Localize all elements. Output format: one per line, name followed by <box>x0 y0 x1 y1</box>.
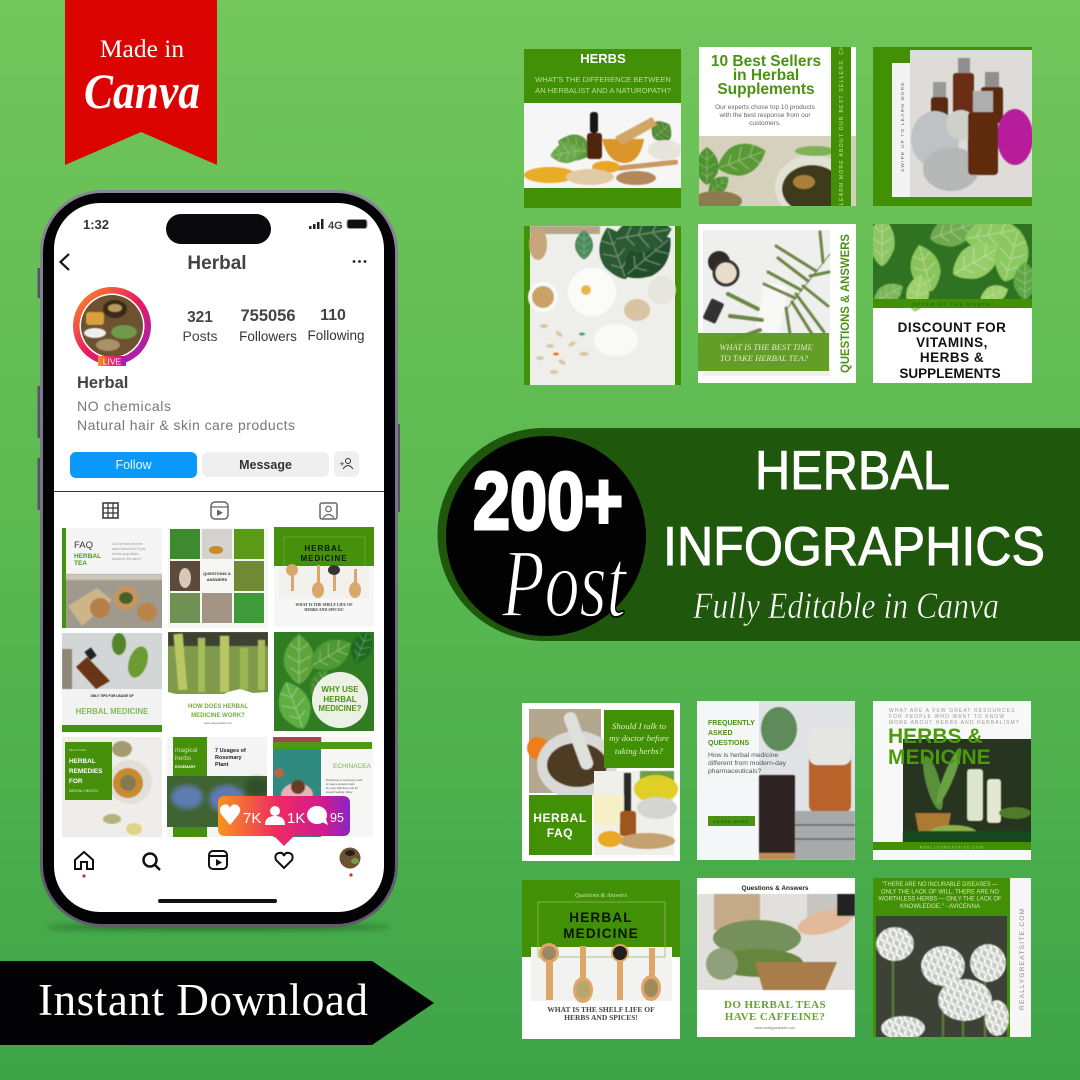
grid post: how does herbal medicine work: www.reallygreatsite.com <box>204 721 232 725</box>
post tile: herbs difference: WHAT'S THE DIFFERENCE BETWEEN <box>535 75 671 84</box>
post tile: frequently asked questions: How is herbal medicine <box>708 752 778 759</box>
post tile: herbs and medicine: WHAT ARE A FEW GREAT RESOURCES <box>889 708 1016 714</box>
grid post: why use herbal medicine: HERBAL <box>323 695 357 704</box>
grid post: magical herbs rosemary: Rosemary <box>215 755 243 761</box>
grid post: herbal medicine spoons: MEDICINE <box>300 554 348 563</box>
grid post: magical herbs rosemary: magical <box>175 747 198 754</box>
grid post: herbal medicine spoons: WHAT IS THE SHELF LIFE OF <box>295 602 353 607</box>
post tile: herbs difference: HERBS <box>580 51 626 66</box>
grid post: magical herbs rosemary: 7 Usages of <box>215 748 246 754</box>
grid post: why use herbal medicine: WHY USE <box>321 685 359 694</box>
grid post: FAQ herbal tea: same herbal tea? If yes, <box>112 547 146 551</box>
post tile: avicenna quote: "THERE ARE NO INCURABLE DISEASES — <box>882 881 998 888</box>
grid post: magical herbs rosemary: herbs <box>175 755 192 762</box>
grid post: how does herbal medicine work: HOW DOES HERBAL <box>188 704 248 710</box>
grid post: herbal remedies: REMEDIES <box>69 768 103 775</box>
post tile: herbs and medicine: REALLYGREATSITE.COM <box>920 846 984 850</box>
grid post: herbal remedies: MENTAL HEALTH <box>69 789 98 793</box>
instant download arrow <box>0 961 434 1045</box>
follow buttons <box>70 451 359 478</box>
banner title: HERBAL <box>755 439 950 501</box>
banner title: INFOGRAPHICS <box>663 515 1045 577</box>
post tile: herbal faq: HERBAL <box>533 811 587 825</box>
grid post: FAQ herbal tea: TEA <box>74 560 87 567</box>
grid post: how does herbal medicine work <box>168 632 268 725</box>
ribbon: Made in Canva: Made in <box>100 34 184 63</box>
post tile: herbal medicine: MEDICINE <box>563 926 639 941</box>
grid post: FAQ herbal tea: are the proportions <box>112 552 139 556</box>
grid post: FAQ herbal tea: HERBAL <box>74 553 101 560</box>
notification bubble: 1K <box>287 810 305 827</box>
post tile: frequently asked questions <box>697 701 855 860</box>
post tile: frequently asked questions: pharmaceuticals? <box>708 768 761 775</box>
grid post: herbal remedies: FOR <box>69 778 83 785</box>
profile stats <box>182 307 365 344</box>
post tile: frequently asked questions: FREQUENTLY <box>708 720 755 727</box>
grid post: essential oil tips: HERBAL MEDICINE <box>76 707 148 716</box>
post tile: 10 best sellers: Our experts chose top 10 products <box>715 104 816 111</box>
profile stats: 110 <box>320 307 346 324</box>
profile header <box>60 253 366 274</box>
grid post: echinacea: ECHINACEA <box>333 763 372 770</box>
post tile: herbal medicine: HERBAL <box>569 910 633 925</box>
bio text: Herbal <box>77 374 128 392</box>
post tile: 10 best sellers: customers. <box>749 120 781 127</box>
grid post: FAQ herbal tea <box>62 528 162 628</box>
grid post: magical herbs rosemary: ROSEMARY <box>175 765 196 769</box>
grid post: herbal remedies: Tips & Tricks <box>69 748 87 752</box>
profile tab icons <box>103 502 337 519</box>
grid post: herbal medicine spoons: HERBAL <box>304 544 344 553</box>
bottom navigation <box>75 848 360 878</box>
post tile: herbs and medicine <box>873 701 1031 860</box>
post tile: questions and answers tea: WHAT IS THE BEST TIME <box>719 342 813 352</box>
status bar: 1:32 <box>83 217 109 232</box>
follow buttons: Follow <box>115 458 153 472</box>
post tile: herbal faq <box>522 703 680 861</box>
notification bubble <box>218 796 350 846</box>
grid post: echinacea: flu, sore infections and for <box>326 786 358 790</box>
grid post: herbs mosaic <box>168 528 268 628</box>
grid post: herbal remedies <box>62 737 162 837</box>
profile stats: 321 <box>187 309 213 326</box>
post tile: 10 best sellers: Supplements <box>717 81 815 98</box>
grid post: herbs mosaic: QUESTIONS & <box>203 571 231 576</box>
grid post: FAQ herbal tea: FAQ <box>74 540 93 551</box>
profile stats: Following <box>307 328 365 343</box>
post tile: herbal faq: FAQ <box>547 826 573 840</box>
post tile: avicenna quote: REALLYGREATSITE.COM <box>1019 908 1026 1010</box>
post tile: herbs and medicine: FOR PEOPLE WHO WANT TO KNOW <box>889 714 1005 720</box>
instant download arrow: Instant Download <box>38 975 368 1025</box>
post tile: herbal medicine <box>522 880 680 1039</box>
post tile: herbal medicine: HERBS AND SPICES! <box>564 1013 638 1022</box>
post tile: herbal teas caffeine <box>697 878 855 1037</box>
grid post: FAQ herbal tea: Can my kids drink the <box>112 542 143 546</box>
bio text: NO chemicals <box>77 398 171 414</box>
post tile: herbal teas caffeine: www.reallygreatsite.com <box>755 1026 795 1030</box>
post tile: avicenna quote: ONLY THE LACK OF WILL. THERE ARE NO <box>881 888 999 896</box>
post tile: frequently asked questions: QUESTIONS <box>708 740 750 747</box>
post tile: herbal faq: my doctor before <box>609 733 669 743</box>
profile stats: Posts <box>182 328 218 344</box>
profile header: Herbal <box>187 253 247 274</box>
post tile: essential oils: SWIPE UP TO LEARN MORE <box>900 81 906 172</box>
post tile: discount: SUPPLEMENTS <box>899 366 1001 381</box>
post tile: herbs difference: AN HERBALIST AND A NATUROPATH? <box>535 86 671 95</box>
post tile: 10 best sellers <box>699 0 856 206</box>
post tile: herbs and medicine: MEDICINE <box>888 746 991 769</box>
bio text: Natural hair & skin care products <box>77 417 295 433</box>
grid post: why use herbal medicine: MEDICINE? <box>319 704 362 713</box>
post tile: herbal teas caffeine: DO HERBAL TEAS <box>724 999 826 1011</box>
post tile: discount: DISCOUNT FOR <box>898 320 1006 335</box>
profile stats: 755056 <box>240 307 296 325</box>
post tile: flatlay herbs <box>524 226 681 385</box>
post tile: avicenna quote: WORTHLESS HERBS — ONLY THE LACK OF <box>878 896 1002 902</box>
post tile: discount: VITAMINS, <box>916 335 988 350</box>
bio text <box>77 374 295 433</box>
post tile: avicenna quote: KNOWLEDGE." - AVICENNA <box>900 903 980 910</box>
post tile: avicenna quote <box>873 878 1031 1037</box>
grid post: essential oil tips <box>62 633 162 732</box>
grid post: echinacea: wound healing. Many <box>326 790 353 794</box>
post tile: herbs and medicine: HERBS & <box>888 725 983 748</box>
post tile: discount: HERBS & <box>920 350 984 365</box>
post tile: frequently asked questions: ASKED <box>708 730 733 737</box>
200+ post circle: Post <box>501 530 628 638</box>
post tile: 10 best sellers: 10 Best Sellers <box>711 53 821 70</box>
follow buttons: Message <box>239 458 292 472</box>
heart icon <box>220 804 240 825</box>
post tile: questions and answers tea: TO TAKE HERBAL TEA? <box>720 353 809 363</box>
ribbon: Made in Canva: Canva <box>84 63 200 119</box>
grid post: essential oil tips: ONLY TIPS FOR USAGE OF <box>90 694 134 698</box>
banner title: Fully Editable in Canva <box>692 586 999 627</box>
home indicator <box>158 899 277 903</box>
post tile: 10 best sellers: in Herbal <box>733 67 799 84</box>
post tile: questions and answers tea: QUESTIONS & ANSWERS <box>838 234 852 373</box>
post tile: questions and answers tea <box>698 224 856 383</box>
post tile: herbal teas caffeine: Questions & Answers <box>742 885 809 892</box>
post tile: herbal medicine: WHAT IS THE SHELF LIFE OF <box>547 1005 655 1014</box>
post tile: herbs difference <box>524 49 681 208</box>
grid post: herbal medicine spoons <box>274 527 374 612</box>
post tile: frequently asked questions: LEARN MORE <box>714 820 749 824</box>
follow buttons: + <box>339 459 345 469</box>
post tile: 10 best sellers: with the best response from our <box>718 112 811 119</box>
post tile: herbal teas caffeine: HAVE CAFFEINE? <box>725 1011 825 1023</box>
grid post: echinacea: Echinacea is commonly used <box>326 778 363 782</box>
divider <box>54 491 384 492</box>
grid post: echinacea: to treat a present colds, <box>326 782 355 786</box>
grid post: why use herbal medicine <box>274 632 374 731</box>
phone mockup <box>38 190 400 930</box>
grid post: herbal medicine spoons: HERBS AND SPICES! <box>304 607 344 612</box>
avatar with live badge: LIVE <box>103 356 122 366</box>
post tile: herbal faq: Should I talk to <box>612 721 667 731</box>
post tile: herbs and medicine: MORE ABOUT HERBS AND HERBALISM? <box>889 720 1020 726</box>
notification bubble: 7K <box>243 810 261 827</box>
post tile: essential oils <box>873 47 1032 206</box>
post tile: frequently asked questions: different from modern-day <box>708 760 787 767</box>
status bar <box>83 214 367 244</box>
grid post: magical herbs rosemary <box>167 737 267 837</box>
banner title <box>663 439 1045 627</box>
200+ post circle <box>446 436 646 638</box>
grid post: herbs mosaic: ANSWERS <box>207 577 228 582</box>
status bar: 4G <box>328 220 343 232</box>
profile stats: Followers <box>239 329 297 344</box>
grid post: echinacea <box>273 737 373 837</box>
grid post: FAQ herbal tea: should be the same? <box>112 557 142 561</box>
grid post: herbal remedies: HERBAL <box>69 758 96 765</box>
avatar with live badge <box>73 287 151 366</box>
post tile: herbal faq: taking herbs? <box>615 746 664 756</box>
post tile: herbal medicine: Questions & Answers <box>575 893 628 899</box>
title banner <box>438 428 1080 641</box>
post tile: discount <box>873 224 1032 383</box>
200+ post circle: 200+ <box>473 456 623 547</box>
notification bubble: 95 <box>330 811 344 825</box>
grid post: how does herbal medicine work: MEDICINE WORK? <box>191 713 245 719</box>
post tile: discount: OFFER OF THE MONTH <box>912 302 992 307</box>
grid post: magical herbs rosemary: Plant <box>215 762 229 768</box>
ribbon: Made in Canva <box>65 0 217 165</box>
